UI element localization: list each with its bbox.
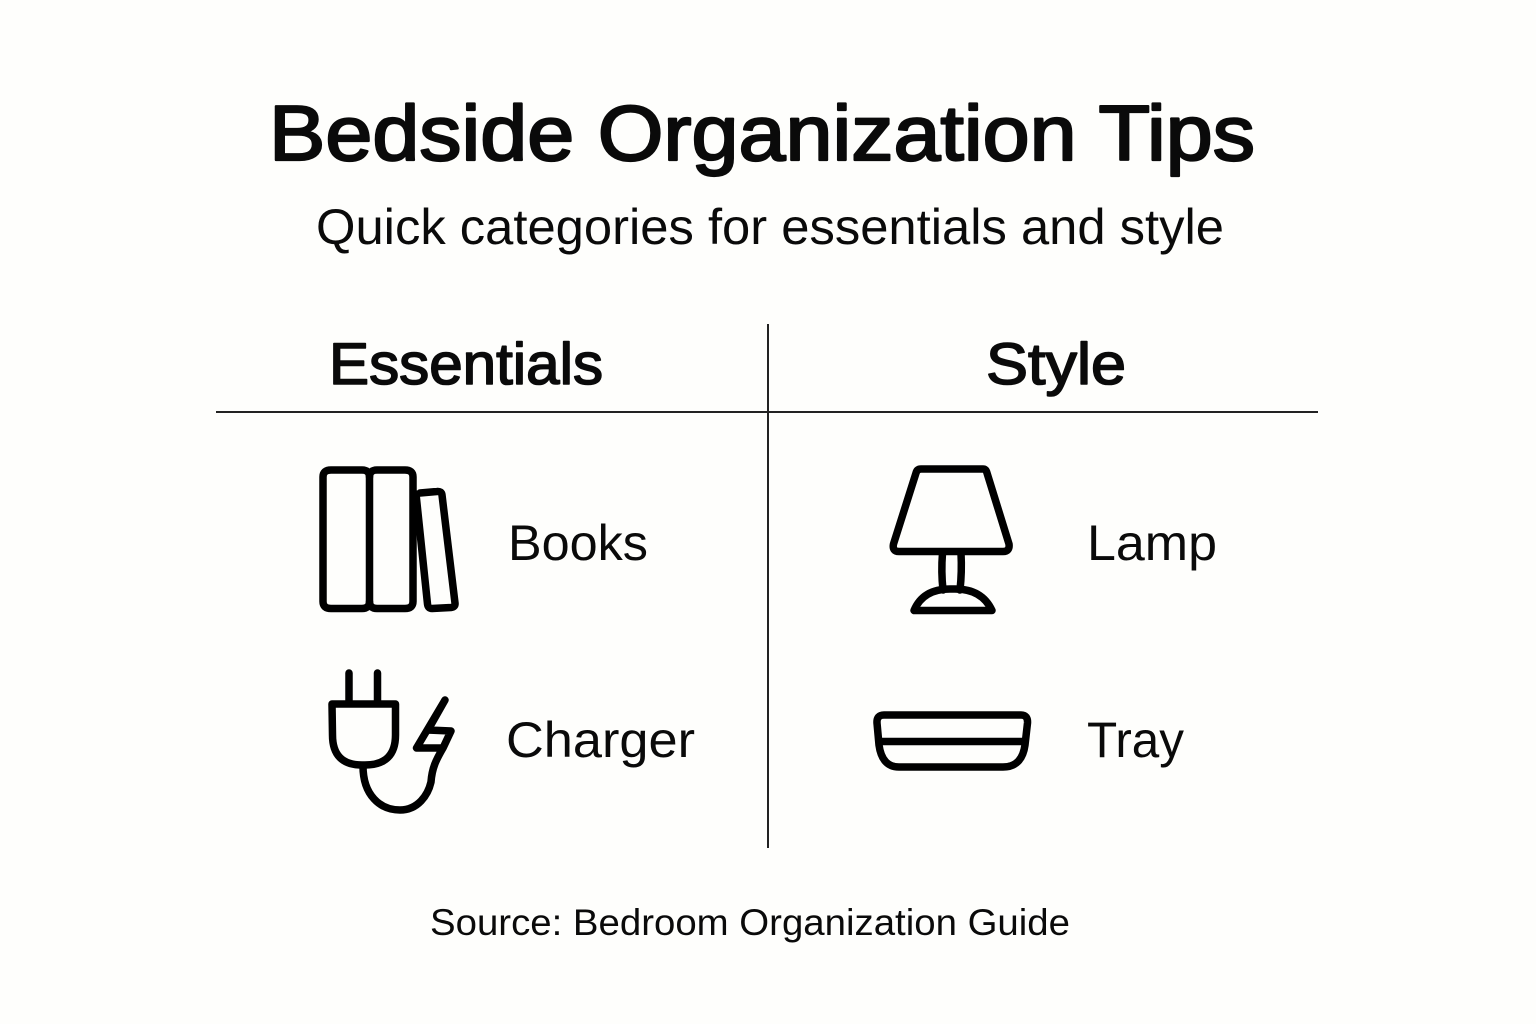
icon: books bbox=[323, 470, 455, 608]
icon: lamp bbox=[893, 469, 1009, 610]
icon: charger plug with lightning bolt bbox=[332, 673, 451, 810]
column heading: Style: Style bbox=[986, 332, 1126, 397]
label: Charger: Charger bbox=[506, 712, 695, 768]
table header divider bbox=[216, 411, 1318, 413]
title: Bedside Organization Tips bbox=[269, 89, 1255, 177]
label: Books: Books bbox=[508, 515, 648, 571]
table column divider bbox=[767, 324, 769, 848]
column heading: Essentials: Essentials bbox=[329, 332, 603, 397]
label: Tray: Tray bbox=[1087, 712, 1184, 768]
icon: tray bbox=[877, 715, 1028, 767]
label: Lamp: Lamp bbox=[1087, 515, 1217, 571]
source note: Source: Bedroom Organization Guide bbox=[430, 902, 1070, 943]
subtitle: Quick categories for essentials and style bbox=[316, 199, 1224, 255]
